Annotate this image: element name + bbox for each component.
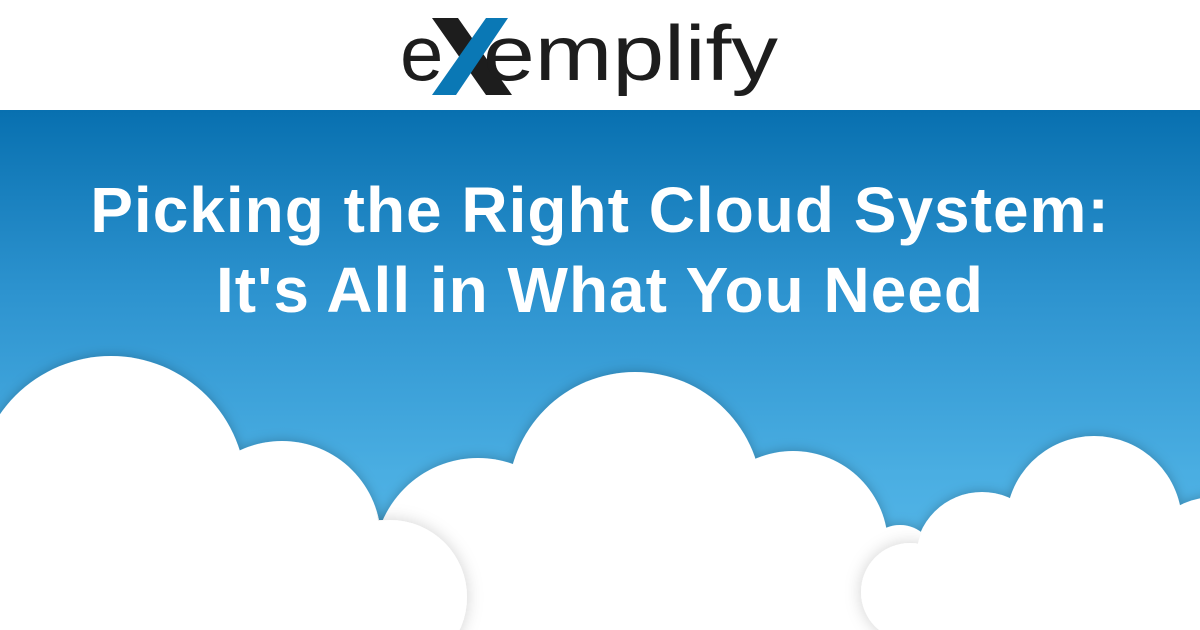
cloud: front left [0,442,467,630]
cloud: front right [861,437,1200,630]
logo: wordmark: e [400,9,443,97]
cloud: right [865,436,1200,630]
logo: wordmark: emplify [483,9,778,97]
title: Picking the Right Cloud System: [90,174,1110,246]
title: It's All in What You Need [216,254,984,326]
logo: X mark [432,18,512,95]
title [90,174,1110,326]
cloud: left [0,356,400,630]
logo: wordmark [400,9,778,97]
header: logo [0,0,1200,110]
cloud: middle [374,372,888,630]
